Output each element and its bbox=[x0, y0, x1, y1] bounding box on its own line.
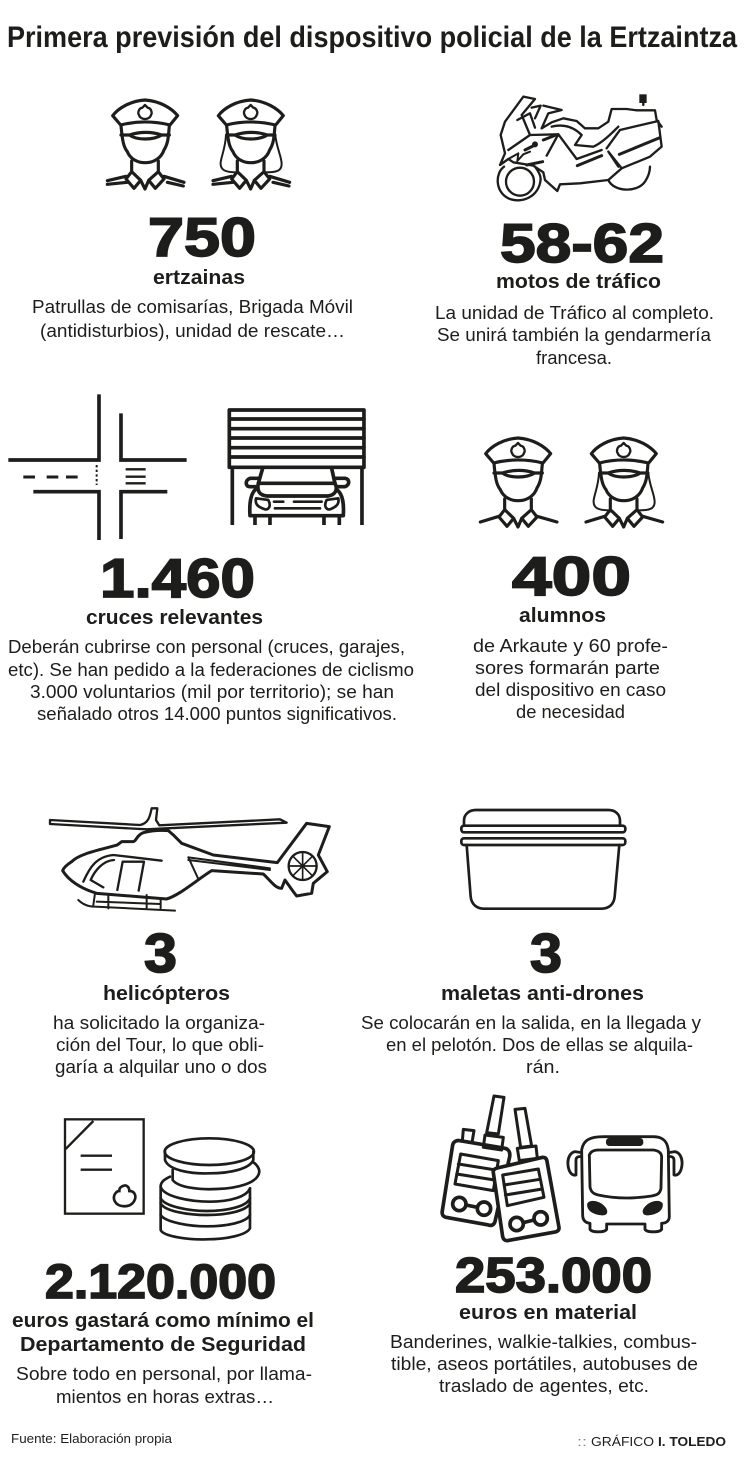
text: presupuesto description: mientos en horas extras… bbox=[56, 1386, 274, 1407]
text: cruces description: 3.000 voluntarios (mil por territorio); se han bbox=[30, 681, 394, 702]
panel: alumnos bbox=[473, 438, 668, 722]
label: alumnos: alumnos bbox=[519, 605, 606, 627]
text: helicópteros description: garía a alquilar uno o dos bbox=[55, 1056, 267, 1077]
label: euros gastará: Departamento de Seguridad bbox=[20, 1334, 306, 1356]
text: material description: traslado de agentes, etc. bbox=[439, 1375, 649, 1396]
icon: anti-drone case bbox=[461, 810, 625, 909]
credit: I. TOLEDO bbox=[658, 1434, 726, 1449]
text: cruces description: Deberán cubrirse con personal (cruces, garajes, bbox=[8, 636, 405, 657]
text: cruces description bbox=[8, 636, 414, 724]
big number: 1.460: 1.460 bbox=[100, 547, 255, 609]
icon: bus bbox=[568, 1137, 682, 1232]
text: maletas description bbox=[361, 1012, 702, 1077]
text: alumnos description: del dispositivo en caso bbox=[475, 679, 666, 700]
text: motos description: Se unirá también la gendarmería bbox=[437, 324, 712, 345]
text: ertzainas description: (antidisturbios), unidad de rescate… bbox=[40, 320, 345, 341]
text: ertzainas description: Patrullas de comisarías, Brigada Móvil bbox=[32, 296, 353, 317]
panel: ertzainas bbox=[32, 100, 353, 341]
text: presupuesto description: Sobre todo en personal, por llama- bbox=[16, 1363, 312, 1384]
text: maletas description: rán. bbox=[526, 1056, 560, 1077]
label: helicópteros: helicópteros bbox=[103, 983, 230, 1005]
icon: walkie-talkies bbox=[442, 1096, 559, 1241]
label: euros gastará bbox=[12, 1310, 314, 1356]
text: ertzainas description bbox=[32, 296, 353, 341]
icon: road crossing bbox=[8, 394, 187, 540]
label: cruces relevantes: cruces relevantes bbox=[86, 607, 263, 629]
icon: helicopter bbox=[50, 808, 329, 911]
text: material description: tible, aseos portátiles, autobuses de bbox=[391, 1353, 698, 1374]
icon: student officers bbox=[480, 438, 663, 527]
panel: material bbox=[390, 1096, 698, 1396]
big number: 3: 3 bbox=[144, 922, 177, 984]
label: ertzainas: ertzainas bbox=[153, 267, 245, 289]
text: cruces description: etc). Se han pedido a la federaciones de ciclismo bbox=[8, 659, 414, 680]
text: alumnos description: de Arkaute y 60 profe- bbox=[473, 635, 668, 656]
panel: motos bbox=[435, 94, 714, 368]
label: euros gastará: euros gastará como mínimo el bbox=[12, 1310, 314, 1332]
text: helicópteros description: ción del Tour, lo que obli- bbox=[56, 1034, 264, 1055]
credit: GRÁFICO bbox=[591, 1434, 654, 1449]
panel: presupuesto bbox=[12, 1119, 314, 1407]
credit: :: bbox=[577, 1434, 587, 1449]
big number: 2.120.000: 2.120.000 bbox=[45, 1256, 276, 1309]
text: helicópteros description bbox=[53, 1012, 267, 1077]
text: motos description: La unidad de Tráfico al completo. bbox=[435, 302, 714, 323]
label: euros en material: euros en material bbox=[459, 1302, 637, 1324]
label: maletas anti-drones: maletas anti-drones bbox=[441, 983, 644, 1005]
big number: 58-62: 58-62 bbox=[500, 212, 664, 274]
text: helicópteros description: ha solicitado la organiza- bbox=[53, 1012, 265, 1033]
text: motos description bbox=[435, 302, 714, 368]
label: motos de tráfico: motos de tráfico bbox=[496, 271, 661, 293]
big number: 253.000: 253.000 bbox=[455, 1249, 652, 1303]
text: alumnos description: de necesidad bbox=[516, 701, 625, 722]
text: material description: Banderines, walkie-talkies, combus- bbox=[390, 1331, 697, 1352]
panel: cruces bbox=[8, 394, 414, 724]
icon: garage with car bbox=[229, 410, 364, 525]
text: material description bbox=[390, 1331, 698, 1396]
icon: police officers bbox=[107, 100, 290, 189]
text: alumnos description: sores formarán parte bbox=[475, 657, 660, 678]
big number: 400: 400 bbox=[512, 545, 631, 607]
text: maletas description: Se colocarán en la salida, en la llegada y bbox=[361, 1012, 702, 1033]
big number: 3: 3 bbox=[530, 922, 562, 984]
source note: Fuente: Elaboración propia bbox=[11, 1431, 173, 1446]
panel: maletas anti-drones bbox=[361, 810, 702, 1077]
icon: motorcycle bbox=[498, 94, 662, 200]
icon: coins bbox=[161, 1138, 259, 1239]
text: motos description: francesa. bbox=[536, 347, 612, 368]
icon: document with seal bbox=[65, 1119, 144, 1214]
panel: helicópteros bbox=[50, 808, 329, 1077]
text: cruces description: señalado otros 14.000 puntos significativos. bbox=[37, 703, 397, 724]
text: presupuesto description bbox=[16, 1363, 312, 1407]
big number: 750: 750 bbox=[148, 206, 256, 268]
text: maletas description: en el pelotón. Dos de ellas se alquila- bbox=[386, 1034, 693, 1055]
text: alumnos description bbox=[473, 635, 668, 722]
credit bbox=[577, 1434, 726, 1449]
